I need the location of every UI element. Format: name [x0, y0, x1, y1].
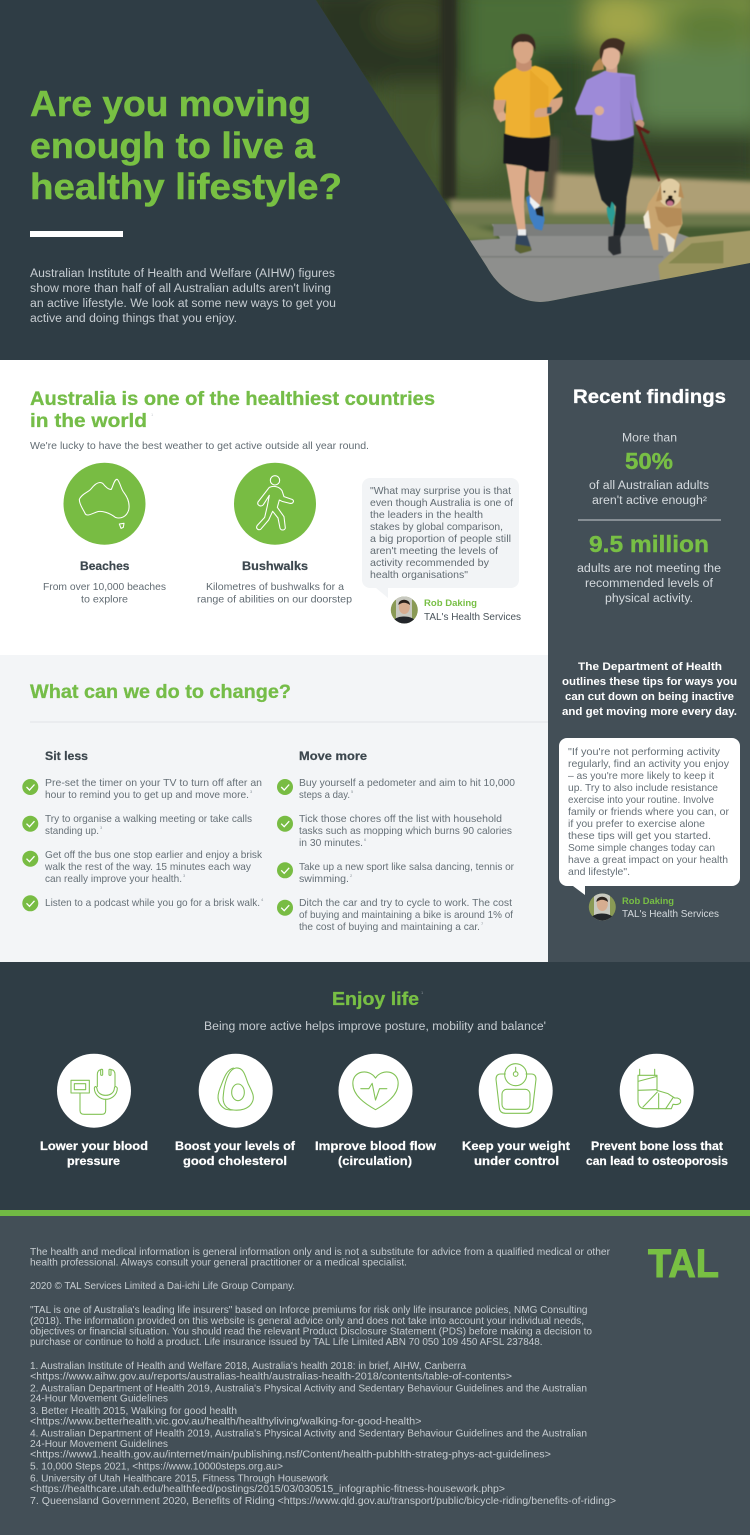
- section heading: 1: [151, 412, 154, 417]
- description: to explore: [81, 594, 128, 606]
- callout: quote from Rob Daking: health organisations": [370, 569, 468, 581]
- references: <https://www.aihw.gov.au/reports/australias-health/australias-health-2018/contents/table-of-contents>: [30, 1371, 512, 1382]
- callout: quote from Rob Daking: and lifestyle".: [568, 866, 630, 878]
- references: 1. Australian Institute of Health and Welfare 2018, Australia's health 2018: in brief, AIHW, Canberra: [30, 1361, 466, 1372]
- green divider band: [0, 1210, 750, 1216]
- title: Are you moving: [30, 83, 311, 124]
- panel: hero: [30, 0, 750, 324]
- department of health intro: can cut down on being inactive: [565, 691, 734, 703]
- panel: what can we do to change: [0, 655, 548, 962]
- tip: podcast: Listen to a podcast while you go for a brisk walk.: [45, 897, 260, 909]
- column heading: Move more: [299, 751, 367, 763]
- tip: pedometer: steps a day.: [299, 789, 350, 801]
- tip: cycling: [277, 897, 513, 933]
- icon: blood pressure monitor: [57, 1054, 131, 1128]
- avatar: Rob Daking: [588, 893, 616, 921]
- tip: timer: [22, 777, 262, 801]
- logo: TAL: TAL: [648, 1242, 719, 1286]
- disclaimer: 2020 © TAL Services Limited a Dai-ichi Life Group Company.: [30, 1281, 295, 1292]
- icon: leg in a cast: [620, 1054, 694, 1128]
- label: [175, 1141, 295, 1168]
- references: <https://www.betterhealth.vic.gov.au/health/healthyliving/walking-for-good-health>: [30, 1416, 422, 1427]
- attribution: Rob Daking: [424, 598, 477, 609]
- description: range of abilities on our doorstep: [197, 594, 352, 606]
- benefit: cholesterol: [175, 1054, 295, 1168]
- section heading: [30, 388, 435, 432]
- callout: quote from Rob Daking: up. Try to also include resistance: [568, 782, 718, 794]
- statistic: 9.5 million: [577, 531, 721, 605]
- tip: chores: 6: [364, 837, 367, 842]
- tip: bus stop: walk the rest of the way. 15 minutes each way: [44, 861, 252, 873]
- label: [315, 1141, 436, 1168]
- callout: quote from Rob Daking: regularly, find an activity you enjoy: [568, 758, 730, 770]
- callout: quote from Rob Daking: family or friends where you can, or: [568, 806, 730, 818]
- label: Prevent bone loss that: [591, 1141, 723, 1153]
- statistic: 9.5 million: physical activity.: [605, 593, 693, 605]
- tip: bus stop: 3: [183, 873, 186, 878]
- callout: quote from Rob Daking: Some simple changes today can: [568, 842, 715, 854]
- icon: heart with pulse: [338, 1054, 412, 1128]
- title: [30, 83, 342, 207]
- label: Beaches: [80, 561, 130, 573]
- attribution: Rob Daking: [622, 896, 674, 907]
- icon: weighing scale: [479, 1054, 553, 1128]
- label: Lower your blood: [40, 1141, 148, 1153]
- column: move more: [277, 751, 515, 933]
- panel: Australia is one of the healthiest countries: [0, 360, 548, 655]
- avatar: Rob Daking: [390, 596, 418, 624]
- callout: quote from Rob Daking: these tips will get you started.: [568, 830, 711, 842]
- references: 7. Queensland Government 2020, Benefits of Riding <https://www.qld.gov.au/transport/public/bicycle-riding/benefits-of-riding>: [30, 1496, 616, 1507]
- label: [40, 1141, 148, 1168]
- tip: new sport: 2: [350, 873, 353, 878]
- intro paragraph: [30, 268, 336, 325]
- label: Improve blood flow: [315, 1141, 436, 1153]
- description: [43, 581, 166, 606]
- callout: quote from Rob Daking: if you prefer to exercise alone: [568, 818, 705, 830]
- tip: timer: Pre-set the timer on your TV to turn off after an: [45, 777, 262, 789]
- tip: podcast: [22, 895, 264, 911]
- disclaimer: [30, 1247, 611, 1348]
- callout: quote from Rob Daking: exercise into your routine. Involve: [568, 794, 714, 806]
- statistic: 50%: More than: [622, 432, 677, 444]
- panel: footer: [0, 1216, 750, 1535]
- description: From over 10,000 beaches: [43, 581, 166, 593]
- panel: enjoy life: [0, 962, 750, 1210]
- divider bar: [30, 231, 123, 237]
- references: 5. 10,000 Steps 2021, <https://www.10000steps.org.au>: [30, 1462, 283, 1473]
- label: (circulation): [338, 1156, 412, 1168]
- callout: quote from Rob Daking: TAL's Health Services: [424, 612, 521, 623]
- intro paragraph: Australian Institute of Health and Welfare (AIHW) figures: [30, 268, 335, 280]
- section heading: What can we do to change?: [30, 681, 291, 703]
- statistic: 50%: aren't active enough²: [592, 495, 707, 507]
- section heading: in the world: [30, 410, 147, 432]
- benefit: weight: [462, 1054, 570, 1168]
- label: Boost your levels of: [175, 1141, 295, 1153]
- tip: timer: hour to remind you to get up and move more.: [45, 789, 249, 801]
- tip: podcast: 4: [261, 897, 264, 902]
- references: 24-Hour Movement Guidelines: [30, 1439, 168, 1450]
- callout: quote from Rob Daking: stakes by global comparison,: [370, 521, 503, 533]
- card: bushwalks: [197, 463, 352, 606]
- tip: walking meeting: [22, 813, 252, 837]
- disclaimer: "TAL is one of Australia's leading life insurers" based on Inforce premiums for risk only life insurance policies, NMG Consulting: [30, 1305, 588, 1316]
- panel: recent findings sidebar: [548, 360, 750, 962]
- tip: pedometer: 5: [351, 789, 354, 794]
- department of health intro: [562, 661, 737, 718]
- description: Kilometres of bushwalks for a: [206, 581, 344, 593]
- tip: bus stop: can really improve your health.: [45, 873, 182, 885]
- tip: cycling: Ditch the car and try to cycle to work. The cost: [299, 897, 512, 909]
- references: <https://healthcare.utah.edu/healthfeed/postings/2015/03/030515_infographic-fitness-housework.php>: [30, 1484, 505, 1495]
- label: pressure: [67, 1156, 120, 1168]
- runner: woman in purple top: [575, 38, 660, 255]
- benefit: blood pressure: [40, 1054, 148, 1168]
- statistic: 50%: 50%: [625, 448, 673, 474]
- callout: quote from Rob Daking: aren't meeting the levels of: [370, 545, 498, 557]
- runner: man in yellow shirt: [493, 34, 563, 253]
- section intro: We're lucky to have the best weather to get active outside all year round.: [30, 440, 369, 452]
- callout: quote from Rob Daking: [559, 738, 740, 921]
- statistic: 9.5 million: recommended levels of: [585, 578, 714, 590]
- intro paragraph: show more than half of all Australian adults aren't living: [30, 283, 331, 295]
- title: healthy lifestyle?: [30, 166, 342, 207]
- callout: quote from Rob Daking: TAL's Health Services: [622, 909, 719, 920]
- callout: quote from Rob Daking: activity recommended by: [370, 557, 490, 569]
- column heading: Sit less: [45, 751, 88, 763]
- icon: avocado: [199, 1054, 273, 1128]
- references: [30, 1361, 616, 1507]
- label: [462, 1141, 570, 1168]
- tip: walking meeting: 3: [100, 825, 103, 830]
- references: <https://www1.health.gov.au/internet/main/publishing.nsf/Content/health-pubhlth-strateg-phys-act-guidelines>: [30, 1450, 551, 1461]
- callout: quote from Rob Daking: a big proportion of people still: [370, 533, 511, 545]
- references: 3. Better Health 2015, Walking for good health: [30, 1406, 237, 1417]
- icon: map of Australia: [64, 463, 146, 545]
- tip: chores: Tick those chores off the list with household: [299, 813, 502, 825]
- tip: new sport: [277, 861, 514, 885]
- disclaimer: The health and medical information is general information only and is not a substitute for advice from a qualified medical or other: [30, 1247, 611, 1258]
- dog: golden retriever: [643, 179, 684, 252]
- column: sit less: [22, 751, 264, 911]
- tip: chores: in 30 minutes.: [299, 837, 363, 849]
- callout: quote from Rob Daking: "If you're not performing activity: [568, 746, 721, 758]
- callout: quote from Rob Daking: even though Australia is one of: [370, 497, 513, 509]
- tip: pedometer: [277, 777, 515, 801]
- section heading: 1: [421, 990, 424, 995]
- callout: quote from Rob Daking: "What may surprise you is that: [370, 485, 511, 497]
- tip: cycling: of buying and maintaining a bike is around 1% of: [299, 909, 513, 921]
- intro paragraph: active and doing things that you enjoy.: [30, 313, 237, 325]
- label: can lead to osteoporosis: [586, 1156, 728, 1168]
- icon: walking person: [234, 463, 316, 545]
- title: enough to live a: [30, 125, 316, 166]
- tip: pedometer: Buy yourself a pedometer and aim to hit 10,000: [299, 777, 515, 789]
- disclaimer: purchase or continue to hold a product. Life insurance issued by TAL Life Limited ABN 70 050 109 450 AFSL 237848.: [30, 1337, 542, 1348]
- statistic: 9.5 million: 9.5 million: [589, 531, 709, 557]
- photo: couple jogging with a dog: [307, 0, 750, 313]
- disclaimer: health professional. Always consult your general practitioner or a medical specialist.: [30, 1258, 407, 1268]
- statistic: 9.5 million: adults are not meeting the: [577, 563, 721, 575]
- statistic: 50%: of all Australian adults: [589, 480, 709, 492]
- tip: cycling: 7: [481, 921, 484, 926]
- disclaimer: (2018). The information provided on this website is general advice only and does not take into account your individual needs,: [30, 1316, 584, 1327]
- section heading: Australia is one of the healthiest countries: [30, 388, 435, 410]
- tip: bus stop: Get off the bus one stop earlier and enjoy a brisk: [45, 849, 263, 861]
- label: Keep your weight: [462, 1141, 570, 1153]
- references: 6. University of Utah Healthcare 2015, Fitness Through Housework: [30, 1474, 329, 1485]
- section heading: Enjoy life: [332, 988, 419, 1009]
- statistic: 50%: [589, 432, 709, 507]
- card: beaches: [43, 463, 166, 606]
- section intro: Being more active helps improve posture, mobility and balance': [204, 1021, 546, 1033]
- label: Bushwalks: [242, 561, 308, 573]
- tip: chores: tasks such as mopping which burns 90 calories: [299, 825, 512, 837]
- tip: new sport: Take up a new sport like salsa dancing, tennis or: [299, 861, 514, 873]
- references: 4. Australian Department of Health 2019, Australia's Physical Activity and Sedentary Behaviour Guidelines and the Australian: [30, 1428, 587, 1439]
- tip: bus stop: [22, 849, 263, 885]
- tip: timer: 3: [250, 789, 253, 794]
- benefit: blood flow: [315, 1054, 436, 1168]
- tip: cycling: the cost of buying and maintaining a car.: [299, 921, 480, 933]
- label: good cholesterol: [183, 1156, 287, 1168]
- description: [197, 581, 352, 606]
- disclaimer: objectives or financial situation. You should read the relevant Product Disclosure Statement (PDS) before making a decision to: [30, 1326, 592, 1338]
- references: 2. Australian Department of Health 2019, Australia's Physical Activity and Sedentary Behaviour Guidelines and the Australian: [30, 1383, 587, 1394]
- intro paragraph: an active lifestyle. We look at some new ways to get you: [30, 298, 336, 310]
- label: [586, 1141, 728, 1168]
- department of health intro: The Department of Health: [578, 661, 722, 673]
- benefit: bones: [586, 1054, 728, 1168]
- callout: quote from Rob Daking: [362, 478, 521, 624]
- tip: new sport: swimming.: [299, 873, 349, 885]
- callout: quote from Rob Daking: have a great impact on your health: [568, 854, 728, 866]
- label: under control: [474, 1156, 559, 1168]
- department of health intro: outlines these tips for ways you: [562, 676, 737, 688]
- runners and dog: [493, 34, 684, 255]
- callout: quote from Rob Daking: – as you're more likely to keep it: [568, 770, 714, 782]
- tip: walking meeting: Try to organise a walking meeting or take calls: [45, 813, 252, 825]
- references: 24-Hour Movement Guidelines: [30, 1394, 168, 1405]
- sidebar heading: Recent findings: [573, 386, 726, 408]
- tip: walking meeting: standing up.: [45, 825, 99, 837]
- tip: chores: [277, 813, 512, 849]
- department of health intro: and get moving more every day.: [562, 706, 737, 718]
- callout: quote from Rob Daking: the leaders in the health: [370, 509, 483, 521]
